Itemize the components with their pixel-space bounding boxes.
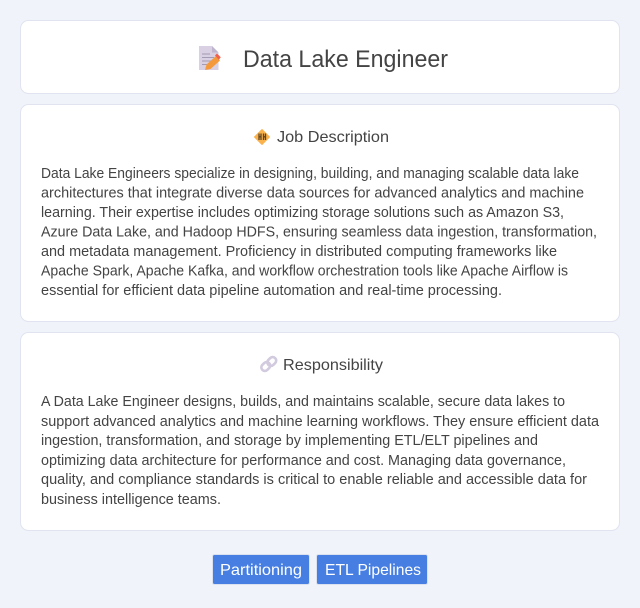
job description text: Data Lake Engineers specialize in designing, building, and managing scalable data lake <box>41 166 579 182</box>
job description text: Apache Spark, Apache Kafka, and workflow orchestration tools like Apache Airflow is <box>41 264 568 280</box>
tag: Partitioning <box>212 554 310 584</box>
tag: Partitioning: Partitioning <box>220 562 302 579</box>
job description text: learning. Their expertise includes optimizing storage solutions such as Amazon S3, <box>41 205 564 221</box>
tag: ETL Pipelines <box>316 554 428 584</box>
responsibility text: A Data Lake Engineer designs, builds, and maintains scalable, secure data lakes to <box>41 394 565 410</box>
tag: ETL Pipelines: ETL Pipelines <box>325 562 421 579</box>
responsibility text: quality, and compliance standards is critical to enable reliable and accessible data for <box>41 472 587 488</box>
panel: responsibility <box>20 332 620 530</box>
panel: job description <box>20 104 620 322</box>
heading: job description: Job Description <box>277 129 389 146</box>
job description text <box>41 166 597 299</box>
responsibility text: business intelligence teams. <box>41 492 221 508</box>
responsibility text: ingestion, transformation, and storage by implementing ETL/ELT pipelines and <box>41 433 538 449</box>
job description text: and metadata management. Proficiency in distributed computing frameworks like <box>41 244 557 260</box>
job description text: architectures that integrate diverse data sources for advanced analytics and machine <box>41 186 584 202</box>
heading: responsibility: Responsibility <box>283 357 383 374</box>
icon: chain link <box>260 356 278 372</box>
job description text: Azure Data Lake, and Hadoop HDFS, ensuring seamless data ingestion, transformation, <box>41 224 597 240</box>
job description text: essential for efficient data pipeline automation and real-time processing. <box>41 283 502 299</box>
responsibility text <box>41 394 600 508</box>
title text: Data Lake Engineer <box>243 46 448 73</box>
panel: title <box>20 20 620 94</box>
responsibility text: support advanced analytics and machine learning workflows. They ensure efficient data <box>41 414 600 430</box>
responsibility text: optimizing data architecture for performance and cost. Managing data governance, <box>41 453 566 469</box>
icon: orange diamond sign <box>254 130 270 144</box>
icon: document with pencil <box>199 46 221 70</box>
